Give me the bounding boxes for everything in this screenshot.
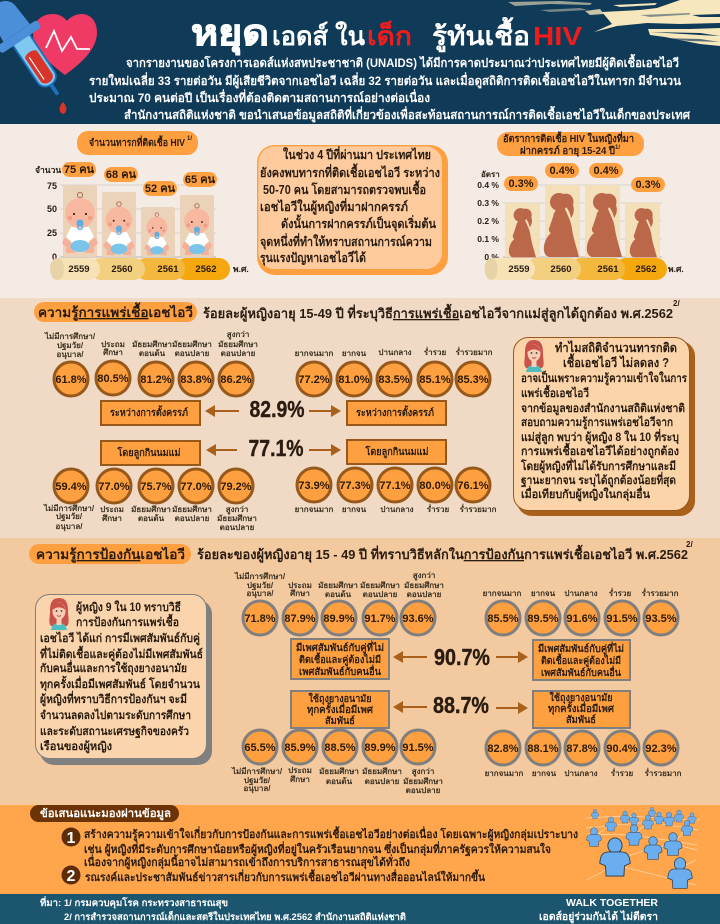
callout: 9 in 10 women: เรือนของผู้หญิง	[40, 740, 112, 754]
method boxes	[291, 639, 630, 728]
axis labels: 0	[52, 252, 57, 262]
axis labels: 0 %	[484, 252, 499, 262]
year tube: 2561	[597, 264, 619, 275]
education labels, bottom: มัธยมศึกษา	[172, 505, 212, 514]
value pills: 0.3%	[508, 178, 534, 190]
category boxes: ระหว่างการตั้งครรภ์	[356, 405, 434, 419]
education labels, bottom: ประถม	[288, 766, 312, 775]
bars with pregnant silhouettes	[505, 185, 660, 257]
method boxes: เพศสัมพันธ์กับคนอื่น	[541, 665, 621, 679]
title: หยุด	[191, 12, 269, 56]
icon: heart with pulse and dropper	[0, 0, 97, 114]
education circles, top: 87.9%	[284, 613, 316, 625]
recommendations heading: ข้อเสนอแนะมองผ่านข้อมูล	[40, 807, 171, 821]
chart title	[497, 131, 644, 157]
education labels, top: ปฐมวัย/	[57, 341, 84, 351]
callout: 9 in 10 women: การป้องกันการแพร่เชื้อ	[76, 613, 179, 629]
panel: centre summary text: รุนแรงปัญหาเอชไอวีได้	[260, 250, 366, 266]
wealth circles, top: 93.5%	[645, 613, 677, 625]
wealth circles, top: 85.1%	[419, 374, 451, 386]
education labels, top: ไม่มีการศึกษา/	[44, 331, 96, 341]
education circles, bottom: 91.5%	[402, 742, 434, 754]
wealth labels, bottom: ร่ำรวย	[427, 503, 449, 514]
education circles, top: 93.6%	[402, 613, 434, 625]
callout: why infant numbers stay	[514, 338, 695, 516]
axis labels: 75	[47, 181, 57, 191]
education labels, bottom: มัธยมศึกษา	[362, 767, 402, 776]
value pills: 0.4%	[593, 165, 619, 177]
method boxes: มีเพศสัมพันธ์กับคู่ที่ไม่	[296, 640, 384, 655]
wealth labels, top: ยากจนมาก	[483, 589, 522, 598]
callout: 9 in 10 women: ที่ไม่ติดเชื้อและคู่ต้องไม่มีเพศสัมพันธ์	[40, 645, 203, 662]
year tube: 2561	[157, 264, 179, 275]
chart title	[77, 131, 198, 155]
education circles, top: 86.2%	[220, 374, 252, 386]
title: เอดส์ ใน	[272, 21, 365, 51]
wealth labels, top: ยากจน	[342, 349, 367, 358]
category boxes: โดยลูกกินนมแม่	[365, 445, 428, 459]
intro text: สำนักงานสถิติแห่งชาติ ขอนำเสนอข้อมูลสถิติที่เกี่ยวข้องเพื่อสะท้อนสถานการณ์การติดเชื้อเอชไอวีในเด็กของประเทศ	[124, 105, 690, 123]
education circles, bottom: 79.2%	[220, 481, 252, 493]
section heading: ร้อยละของผู้หญิงอายุ 15 - 49 ปี ที่ทราบวิธีหลักในการป้องกันการแพร่เชื้อเอชไอวี พ.ศ.2562	[197, 544, 688, 563]
education labels, top: มัธยมศึกษา	[404, 581, 444, 590]
method boxes: ติดเชื้อและคู่ต้องไม่มี	[299, 652, 381, 667]
chart title: จำนวนทารกที่ติดเชื้อ HIV	[89, 135, 185, 149]
wealth labels, top: ยากจน	[531, 589, 556, 598]
method boxes: เพศสัมพันธ์กับคนอื่น	[299, 664, 381, 678]
recommendations heading	[30, 805, 179, 822]
value pills	[504, 163, 665, 192]
value pills: 0.4%	[549, 165, 575, 177]
education labels, bottom: อนุบาล/	[56, 522, 83, 532]
wealth labels, bottom: ร่ำรวย	[611, 767, 633, 778]
callout: why infant numbers stay: เชื้อเอชไอวี ไม่ลดลง ?	[563, 353, 669, 370]
year tube: 2560	[550, 264, 572, 275]
education labels, bottom: ตอนปลาย	[220, 523, 255, 532]
wealth labels, bottom: ยากจน	[342, 505, 367, 514]
wealth labels, bottom: ร่ำรวยมาก	[645, 767, 682, 778]
recommendation 2 text: รณรงค์และประชาสัมพันธ์ข่าวสารเกี่ยวกับการแพร่เชื้อเอชไอวีผ่านทางสื่อออนไลน์ให้มากขึ้น	[85, 869, 485, 884]
callout: 9 in 10 women: เอชไอวี ได้แก่ การมีเพศสัมพันธ์กับคู่	[40, 631, 200, 646]
panel: centre summary text: ดังนั้นการฝากครรภ์เป็นจุดเริ่มต้น	[281, 214, 436, 232]
year tube	[484, 258, 684, 280]
callout: 9 in 10 women: จำนวนลดลงไปตามระดับการศึกษา	[40, 708, 191, 722]
callout: why infant numbers stay: อาจเป็นเพราะความรู้ความเข้าใจในการ	[521, 370, 688, 386]
axis labels	[35, 165, 61, 262]
education labels, top	[44, 330, 258, 360]
panel: centre summary text: ยังคงพบทารกที่ติดเชื้อเอชไอวี ระหว่าง	[260, 163, 440, 180]
year tube: 2562	[195, 264, 217, 275]
education labels, top: อนุบาล/	[247, 589, 274, 599]
value pills: 52 คน	[145, 183, 176, 195]
year tube: 2559	[68, 264, 90, 275]
education labels, bottom: ปฐมวัย/	[244, 776, 271, 786]
education circles, bottom: 77.0%	[180, 481, 212, 493]
year tube: พ.ศ.	[668, 264, 684, 274]
method boxes: ทุกครั้งเมื่อมีเพศ	[548, 701, 615, 715]
value pills: 75 คน	[64, 164, 95, 176]
value pills: 0.3%	[635, 179, 661, 191]
wealth circles, top	[297, 362, 490, 396]
wealth circles, bottom: 76.1%	[457, 480, 489, 492]
education circles, bottom: 59.4%	[55, 481, 87, 493]
section heading: ความรู้การป้องกันเอชไอวี	[36, 546, 185, 563]
education labels, top: ตอนปลาย	[221, 349, 256, 358]
wealth circles, bottom: 87.8%	[566, 743, 598, 755]
section heading: ร้อยละผู้หญิงอายุ 15-49 ปี ที่ระบุวิธีการแพร่เชื้อเอชไอวีจากแม่สู่ลูกได้ถูกต้อง พ.ศ.2562	[203, 303, 673, 322]
wealth circles, top: 89.5%	[527, 613, 559, 625]
callout: why infant numbers stay: จากข้อมูลของสำนักงานสถิติแห่งชาติ	[521, 401, 685, 416]
axis labels: 25	[47, 228, 57, 238]
recommendation 1 text: เช่น ผู้หญิงที่มีระดับการศึกษาน้อยหรือผู้หญิงที่อยู่ในครัวเรือนยากจน ซึ่งเป็นกลุ่มที่ภาครัฐควรให้ความสนใจ	[84, 841, 551, 857]
education circles, bottom: 77.0%	[98, 481, 130, 493]
wealth labels, bottom: ร่ำรวยมาก	[460, 503, 497, 514]
education labels, bottom: ไม่มีการศึกษา/	[43, 503, 95, 513]
wealth labels, top: ร่ำรวย	[424, 346, 446, 357]
intro text: ประมาณ 70 คนต่อปี เป็นเรื่องที่ต้องติดตามสถานการณ์อย่างต่อเนื่อง	[89, 89, 430, 105]
education labels, bottom: ตอนต้น	[138, 513, 165, 523]
education labels, bottom	[43, 503, 257, 532]
slogan: เอดส์อยู่ร่วมกันได้ ไม่ตีตรา	[539, 910, 658, 924]
education labels, top: มัธยมศึกษา	[218, 340, 258, 349]
education labels, bottom: มัธยมศึกษา	[217, 514, 257, 523]
wealth circles, top: 81.0%	[338, 374, 370, 386]
section heading	[29, 540, 693, 564]
education circles, bottom: 85.9%	[284, 742, 316, 754]
wealth labels, top: ยากจนมาก	[295, 349, 334, 358]
callout: 9 in 10 women: กับคนอื่นและการใช้ถุงยางอนามัย	[40, 659, 187, 676]
overall figures: 90.7%	[434, 644, 490, 670]
panel: centre summary text: ในช่วง 4 ปีที่ผ่านมา ประเทศไทย	[283, 146, 431, 162]
wealth circles, top: 85.5%	[487, 613, 519, 625]
education labels, top: ประถม	[288, 581, 312, 590]
education circles, bottom: 65.5%	[244, 742, 276, 754]
education circles, top: 81.2%	[140, 374, 172, 386]
panel: infant HIV counts chart	[35, 131, 249, 280]
sources: ที่มา: 1/ กรมควบคุมโรค กระทรวงสาธารณสุข	[40, 895, 228, 909]
icon: woman	[524, 340, 544, 372]
wealth labels, top: ปานกลาง	[564, 589, 598, 598]
method boxes: ทุกครั้งเมื่อมีเพศ	[307, 702, 374, 716]
panel: centre summary text	[257, 145, 448, 275]
wealth circles, top: 91.6%	[566, 613, 598, 625]
education labels, top: ศึกษา	[290, 589, 310, 598]
value pills: 65 คน	[185, 174, 216, 186]
method boxes: สัมพันธ์	[325, 715, 355, 727]
axis labels	[477, 170, 500, 262]
wealth labels, bottom	[295, 503, 497, 514]
wealth circles, bottom: 92.3%	[645, 743, 677, 755]
wealth circles, bottom: 77.1%	[379, 480, 411, 492]
overall figures: 82.9%	[250, 396, 304, 422]
axis labels: จำนวน	[35, 165, 61, 175]
callout: why infant numbers stay: สอบถามความรู้การแพร่เอชไอวีจาก	[521, 415, 673, 430]
axis labels: 50	[47, 204, 57, 214]
education labels, bottom: ไม่มีการศึกษา/	[231, 766, 283, 776]
overall figures	[433, 644, 490, 718]
method boxes: สัมพันธ์	[566, 714, 596, 726]
education labels, bottom: ตอนปลาย	[406, 786, 441, 795]
panel: HIV rate in pregnant women chart	[477, 131, 684, 280]
callout: why infant numbers stay: แพร่เชื้อเอชไอวี	[521, 384, 589, 400]
method boxes: ใช้ถุงยางอนามัย	[550, 691, 613, 704]
section heading: 2/	[673, 299, 680, 308]
education labels, bottom: มัธยมศึกษา	[131, 505, 171, 514]
sources	[40, 895, 406, 923]
axis labels: อัตรา	[481, 170, 500, 179]
wealth circles, bottom: 80.0%	[419, 480, 451, 492]
wealth circles, top: 85.3%	[457, 374, 489, 386]
sources: 2/ การสำรวจสถานการณ์เด็กและสตรีในประเทศไทย พ.ศ.2562 สำนักงานสถิติแห่งชาติ	[64, 910, 406, 923]
section heading: ความรู้การแพร่เชื้อเอชไอวี	[38, 302, 193, 321]
chart title: ฝากครรภ์ อายุ 15-24 ปี	[520, 145, 615, 157]
number badge 1: 1	[67, 830, 76, 847]
category boxes: โดยลูกกินนมแม่	[117, 446, 180, 460]
callout: why infant numbers stay: การแพร่เชื้อเอชไอวีได้อย่างถูกต้อง	[521, 442, 679, 459]
education labels, top: ตอนปลาย	[407, 590, 442, 599]
wealth circles, top	[486, 601, 678, 635]
panel: prevention knowledge	[0, 538, 720, 805]
wealth circles, top: 77.2%	[298, 374, 330, 386]
education labels, top	[234, 571, 444, 599]
callout: why infant numbers stay: ทำไมสถิติจำนวนทารกติด	[555, 340, 677, 355]
wealth labels, top: ร่ำรวยมาก	[456, 346, 493, 357]
education labels, top: ไม่มีการศึกษา/	[234, 571, 286, 581]
panel: centre summary text: จุดหนึ่งที่ทำให้ทราบสถานการณ์ความ	[260, 233, 432, 250]
wealth circles, bottom	[297, 468, 490, 502]
year tube: 2559	[508, 264, 530, 275]
overall figures: 77.1%	[248, 435, 304, 461]
panel: centre summary text: 50-70 คน โดยสามารถตรวจพบเชื้อ	[263, 180, 426, 197]
wealth labels, bottom: ยากจนมาก	[295, 505, 334, 514]
arrows	[205, 405, 341, 456]
wealth circles, bottom: 73.9%	[298, 480, 330, 492]
wealth circles, bottom: 77.3%	[339, 480, 371, 492]
wealth circles, bottom	[486, 731, 678, 765]
arrows	[393, 651, 528, 714]
education labels, top: สูงกว่า	[227, 330, 249, 340]
education labels, bottom: อนุบาล/	[244, 784, 271, 794]
title: HIV	[533, 21, 583, 51]
callout: why infant numbers stay: แม่สู่ลูก พบว่า ผู้หญิง 8 ใน 10 ที่ระบุ	[521, 428, 679, 445]
education labels, bottom: ปฐมวัย/	[56, 512, 83, 522]
education circles, bottom	[243, 730, 435, 764]
axis labels: 0.3 %	[477, 198, 499, 208]
slogan: WALK TOGETHER	[566, 897, 658, 909]
callout: why infant numbers stay: โดยผู้หญิงที่ไม่ได้รับการศึกษาและมี	[520, 457, 676, 474]
wealth circles, top: 83.5%	[378, 374, 410, 386]
education labels, top: ประถม	[101, 340, 125, 349]
wealth labels, bottom	[485, 767, 682, 778]
wealth circles, bottom: 88.1%	[527, 743, 559, 755]
axis labels: 0.2 %	[477, 216, 499, 226]
education labels, bottom: ประถม	[100, 505, 124, 514]
education labels, bottom: ศึกษา	[290, 775, 310, 784]
overall figures: 88.7%	[433, 692, 489, 718]
education circles, top: 83.8%	[180, 374, 212, 386]
education labels, bottom: ตอนปลาย	[175, 514, 210, 523]
education labels, bottom: ศึกษา	[102, 514, 122, 523]
category boxes	[101, 401, 446, 465]
wealth labels, bottom: ยากจนมาก	[485, 769, 524, 778]
section heading: 2/	[686, 540, 693, 549]
education labels, bottom: ตอนต้น	[326, 776, 353, 786]
education labels, bottom: สูงกว่า	[226, 505, 248, 515]
wealth labels, bottom: ปานกลาง	[564, 769, 598, 778]
year tube: 2560	[111, 264, 133, 275]
wealth circles, bottom: 82.8%	[487, 743, 519, 755]
education circles, bottom: 75.7%	[140, 481, 172, 493]
intro text: รายใหม่เฉลี่ย 33 รายต่อวัน มีผู้เสียชีวิตจากเอชไอวี เฉลี่ย 32 รายต่อวัน และเมื่อดูสถิติการติดเชื้อเอชไอวีในทารก มีจำนวน	[89, 71, 682, 89]
wealth labels, top: ร่ำรวย	[609, 587, 631, 598]
callout: 9 in 10 women: ทุกครั้งเมื่อมีเพศสัมพันธ์ โดยจำนวน	[40, 675, 200, 692]
wealth labels, top	[295, 346, 493, 358]
wealth labels, top	[483, 587, 679, 598]
number badge 2: 2	[67, 868, 76, 885]
education circles, top	[243, 601, 435, 635]
education labels, top: มัธยมศึกษา	[172, 340, 212, 349]
intro text: จากรายงานของโครงการเอดส์แห่งสหประชาชาติ (UNAIDS) ได้มีการคาดประมาณว่าประเทศไทยมีผู้ติดเชื้อเอชไอวี	[126, 53, 679, 71]
intro text	[89, 53, 690, 123]
method boxes: มีเพศสัมพันธ์กับคู่ที่ไม่	[538, 641, 624, 656]
number badge 2	[62, 866, 80, 885]
education labels, top: ศึกษา	[103, 348, 123, 357]
number badge 1	[62, 828, 80, 847]
wealth circles, top: 91.5%	[606, 613, 638, 625]
panel: transmission knowledge	[0, 298, 720, 538]
education labels, top: มัธยมศึกษา	[318, 581, 358, 590]
axis labels: 0.4 %	[477, 180, 499, 190]
recommendation 1 text: เนื่องจากผู้หญิงกลุ่มนี้อาจไม่สามารถเข้าถึงการบริการสาธารณสุขได้ทั่วถึง	[84, 854, 410, 870]
callout: 9 in 10 women: และระดับสถานะเศรษฐกิจของครัว	[40, 725, 189, 739]
bars with babies	[62, 185, 214, 257]
value pills: 68 คน	[106, 169, 137, 181]
education labels, top: ตอนปลาย	[363, 590, 398, 599]
education labels, top: ปฐมวัย/	[247, 581, 274, 591]
year tube: พ.ศ.	[233, 264, 249, 274]
education circles, bottom	[54, 469, 253, 503]
title: เด็ก	[367, 20, 412, 51]
education labels, top: อนุบาล/	[57, 350, 84, 360]
education circles, top: 71.8%	[244, 613, 276, 625]
section heading	[34, 299, 680, 322]
education circles, bottom: 89.9%	[364, 742, 396, 754]
education circles, top: 61.8%	[55, 374, 87, 386]
callout: 9 in 10 women: ผู้หญิง 9 ใน 10 ทราบวิธี	[76, 600, 181, 615]
method boxes: ใช้ถุงยางอนามัย	[308, 692, 372, 705]
chart title: 1/	[615, 145, 620, 151]
chart title: อัตราการติดเชื้อ HIV ในหญิงที่มา	[503, 131, 634, 145]
education circles, top: 89.9%	[323, 613, 355, 625]
category boxes: ระหว่างการตั้งครรภ์	[110, 405, 188, 419]
panel: recommendations	[0, 805, 720, 894]
icon: woman	[49, 598, 69, 630]
education labels, top: มัธยมศึกษา	[132, 340, 172, 349]
education labels, bottom: ตอนปลาย	[365, 777, 400, 786]
education circles, top: 91.7%	[364, 613, 396, 625]
value pills	[62, 162, 217, 196]
wealth labels, top: ปานกลาง	[378, 348, 412, 357]
title	[191, 12, 583, 56]
recommendation 1 text: สร้างความรู้ความเข้าใจเกี่ยวกับการป้องกันและการแพร่เชื้อเอชไอวีอย่างต่อเนื่อง โดยเฉพาะผู้หญิงกลุ่มเปราะบาง	[84, 826, 578, 842]
education labels, top: สูงกว่า	[413, 571, 435, 581]
title: รู้ทันเชื้อ	[432, 16, 530, 53]
slogan	[539, 897, 658, 924]
wealth circles, bottom: 90.4%	[606, 743, 638, 755]
chart title: 1/	[187, 136, 192, 142]
education labels, bottom: มัธยมศึกษา	[403, 777, 443, 786]
education labels, top: ตอนต้น	[325, 589, 352, 599]
brush stroke decoration	[508, 0, 720, 46]
icon: people network	[586, 807, 700, 888]
education circles, top: 80.5%	[97, 373, 129, 385]
callout: 9 in 10 women	[36, 594, 212, 765]
callout: 9 in 10 women: ผู้หญิงที่ทราบวิธีการป้องกันฯ จะมี	[40, 690, 187, 707]
method boxes: ติดเชื้อและคู่ต้องไม่มี	[541, 653, 621, 668]
footer	[0, 894, 720, 924]
education labels, bottom	[231, 766, 443, 795]
panel: centre summary text: เอชไอวีในผู้หญิงที่มาฝากครรภ์	[260, 198, 408, 215]
overall figures	[248, 396, 304, 461]
callout: why infant numbers stay: เมื่อเทียบกับผู้หญิงในกลุ่มอื่น	[521, 485, 650, 502]
axis labels: 0.1 %	[477, 234, 499, 244]
wealth labels, bottom: ยากจน	[532, 769, 557, 778]
education labels, bottom: สูงกว่า	[412, 767, 434, 777]
year tube	[50, 258, 249, 280]
year tube: 2562	[635, 264, 657, 275]
education labels, top: ตอนปลาย	[175, 349, 210, 358]
recommendation 1 text	[84, 826, 578, 870]
education labels, top: มัธยมศึกษา	[360, 581, 400, 590]
wealth labels, top: ร่ำรวยมาก	[642, 587, 679, 598]
education circles, bottom: 88.5%	[324, 742, 356, 754]
education labels, top: ตอนต้น	[139, 348, 166, 358]
education circles, top	[54, 361, 253, 396]
education labels, bottom: มัธยมศึกษา	[319, 767, 359, 776]
wealth labels, bottom: ปานกลาง	[380, 505, 414, 514]
callout: why infant numbers stay: ฐานะยากจน ระบุได้ถูกต้องน้อยที่สุด	[521, 471, 676, 488]
